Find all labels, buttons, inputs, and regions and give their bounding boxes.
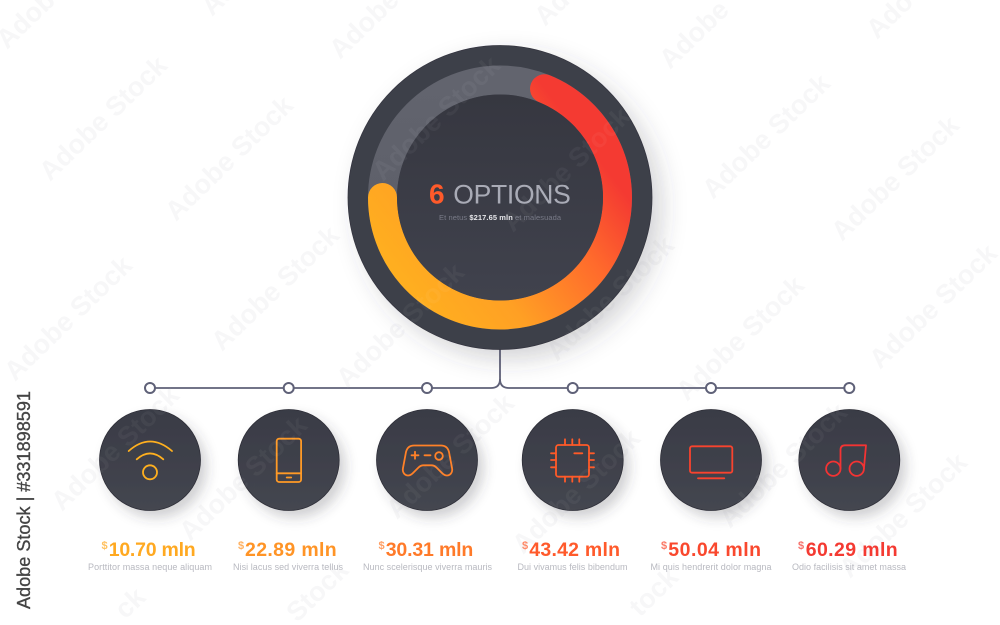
- watermark pattern on background: Adobe Stock: [506, 422, 647, 559]
- connector lines: [150, 349, 849, 388]
- watermark overlay on dark shapes: Adobe Stock: [45, 379, 186, 516]
- watermark pattern on background: Adobe Stock: [670, 269, 811, 406]
- price: $: [661, 540, 667, 552]
- icon: tv screen: [690, 446, 732, 478]
- option 3: game controller: [363, 410, 492, 572]
- price: 10.70 mln: [109, 539, 196, 561]
- icon: music note: [826, 445, 866, 476]
- watermark pattern on background: Adobe Stock: [205, 219, 346, 356]
- description: Porttitor massa neque aliquam: [88, 562, 212, 572]
- watermark overlay on dark shapes: Adobe Stock: [506, 422, 647, 559]
- watermark pattern on background: Adobe Stock: [833, 446, 974, 583]
- option 2: phone: [233, 410, 344, 572]
- option 6: music: [792, 410, 906, 572]
- watermark overlay on dark shapes: Adobe Stock: [330, 256, 471, 393]
- watermark pattern on background: Adobe Stock: [0, 249, 139, 386]
- watermark pattern on background: Adobe Stock: [45, 379, 186, 516]
- watermark pattern on background: Adobe Stock: [713, 396, 854, 533]
- price: $: [798, 540, 804, 552]
- watermark pattern on background: ck: [109, 581, 152, 624]
- price: $: [378, 540, 385, 552]
- watermark overlay on dark shapes: Adobe Stock: [380, 387, 521, 524]
- description: Nunc scelerisque viverra mauris: [363, 562, 492, 572]
- watermark pattern on background: Adobe Stock: [825, 109, 966, 246]
- option 5: monitor: [650, 410, 772, 572]
- watermark pattern on background: Adobe Stock: [159, 89, 300, 226]
- watermark pattern on background: Adobe Stock: [696, 67, 837, 204]
- watermark overlay on dark shapes: [45, 49, 854, 559]
- price: 30.31 mln: [386, 539, 473, 561]
- price: $: [522, 540, 528, 552]
- icon: smartphone: [277, 439, 301, 482]
- watermark pattern on background: tock: [623, 561, 685, 622]
- watermark overlay on dark shapes: Adobe Stock: [713, 396, 854, 533]
- watermark overlay on dark shapes: Adobe Stock: [540, 229, 681, 366]
- stock id label: Adobe Stock | #331898591: [14, 391, 34, 609]
- description: Odio facilisis sit amet massa: [792, 562, 906, 572]
- description: Dui vivamus felis bibendum: [518, 562, 628, 572]
- watermark overlay on dark shapes: Adobe Stock: [366, 49, 507, 186]
- description: Nisi lacus sed viverra tellus: [233, 562, 344, 572]
- price: $: [102, 540, 108, 552]
- main donut chart: [348, 46, 652, 350]
- watermark pattern on background: Adobe Stock: [540, 229, 681, 366]
- price: 22.89 mln: [245, 539, 337, 561]
- option 4: chip: [518, 410, 628, 572]
- icon: wifi: [129, 442, 172, 479]
- watermark overlay on dark shapes: Adobe Stock: [173, 409, 314, 546]
- watermark pattern on background: Adobe Stock: [173, 409, 314, 546]
- price: 50.04 mln: [668, 539, 761, 561]
- description: Mi quis hendrerit dolor magna: [650, 562, 772, 572]
- watermark pattern on background: Adobe Stock: [863, 237, 1000, 374]
- watermark pattern on background: Adobe Stock: [330, 256, 471, 393]
- center heading: 6: [429, 178, 445, 209]
- icon: gamepad: [403, 446, 452, 476]
- price: $: [238, 540, 244, 552]
- center subtitle: Et netus $217.65 mln et malesuada: [439, 213, 562, 222]
- price: 43.42 mln: [529, 539, 620, 561]
- price: 60.29 mln: [806, 539, 898, 561]
- watermark pattern on background: Adobe Stock: [380, 387, 521, 524]
- option 1: wifi: [88, 410, 212, 572]
- center heading: OPTIONS: [453, 179, 571, 209]
- watermark pattern on background: Adobe Stock: [33, 49, 174, 186]
- connector nodes: [145, 383, 854, 393]
- icon: processor: [551, 439, 594, 482]
- watermark overlay on dark shapes: Adobe Stock: [496, 100, 637, 237]
